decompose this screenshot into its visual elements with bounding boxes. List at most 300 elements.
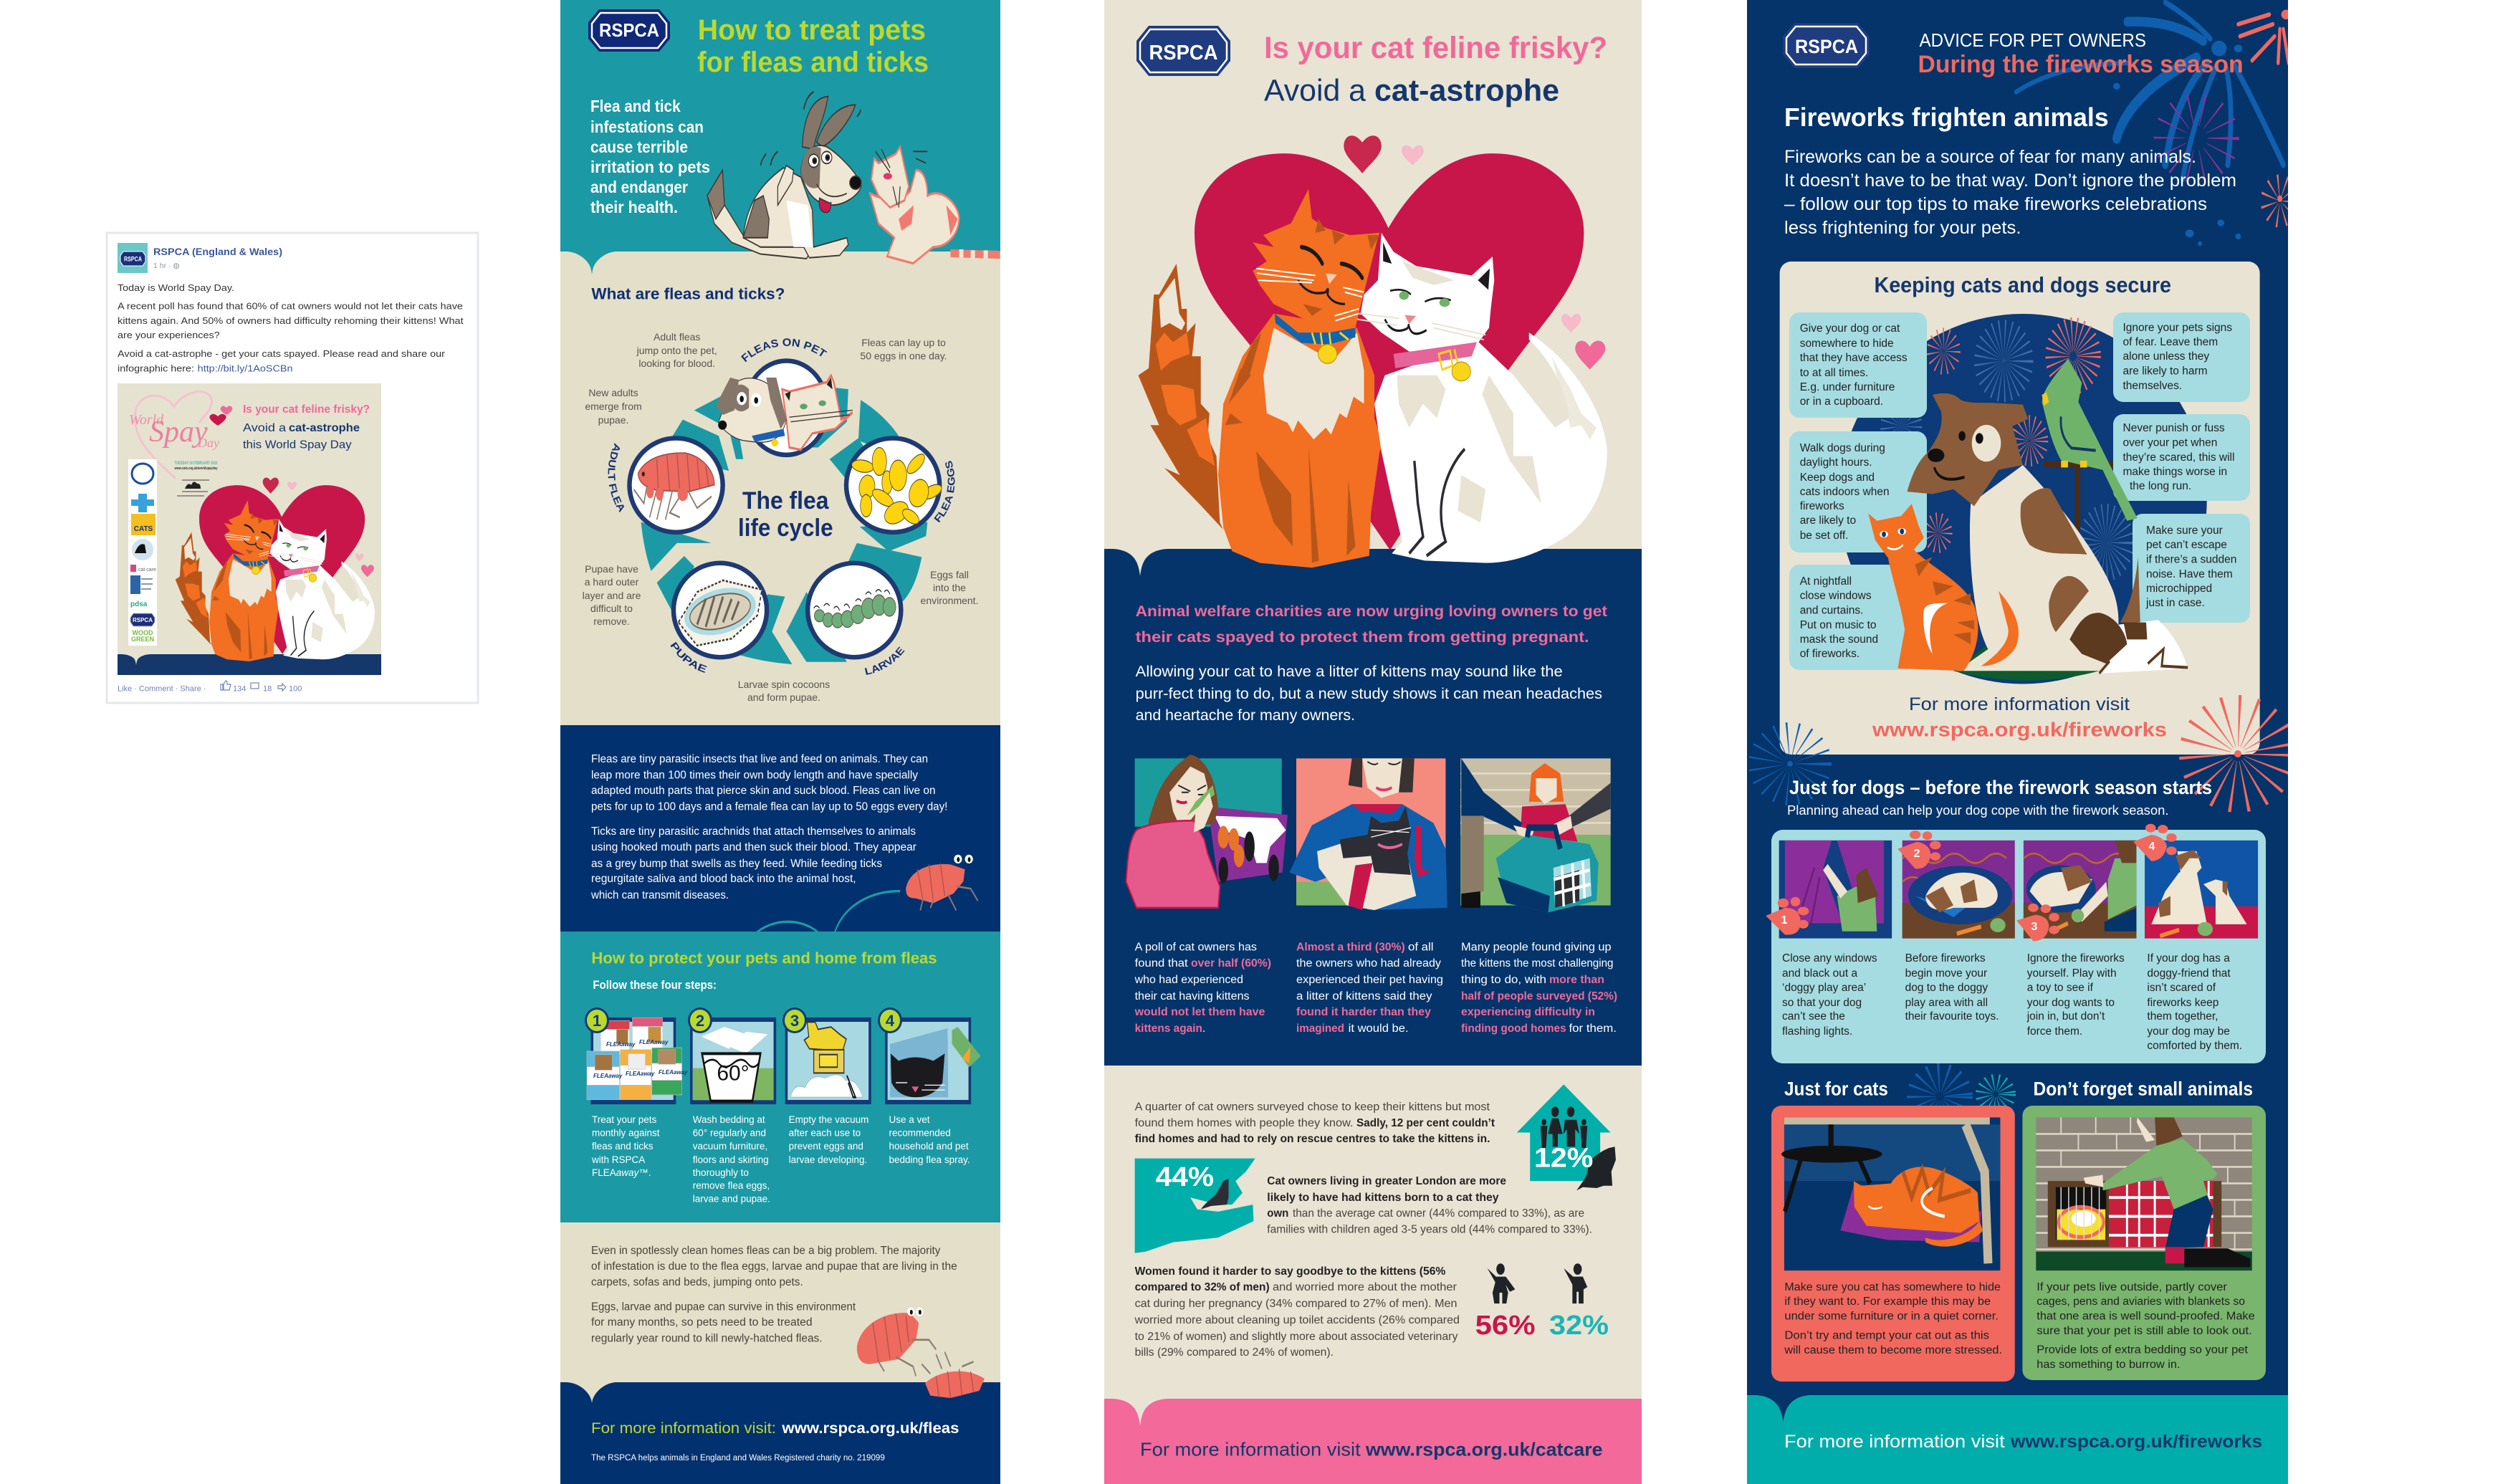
callout: ignore signs of fear: themselves.: [2122, 380, 2182, 392]
footer text: www.rspca.org.uk/fireworks: [2010, 1432, 2262, 1452]
orange cat collar: [1275, 314, 1355, 345]
survey caption 1: who had experienced: [1134, 974, 1243, 986]
callout: never punish: over your pet when: [2122, 437, 2217, 449]
world spay day logo: World: [129, 412, 164, 428]
step captions: can’t see the: [1782, 1010, 1845, 1023]
pack labels: [593, 1039, 688, 1079]
text: will cause them to become more stressed.: [1784, 1344, 2002, 1356]
step 2: wash at 60 degrees: [688, 1007, 775, 1102]
illustration: dog, parrot, cat and guinea pig: [1868, 358, 2188, 674]
callout: close windows: [1789, 565, 1915, 670]
teal steps section: [560, 932, 1000, 1222]
text: women and men: and worried more about the mother: [1273, 1281, 1458, 1293]
step captions: Close any windows: [1782, 952, 1877, 964]
step captions: a toy to see if: [2027, 982, 2094, 994]
callout: ignore signs of fear: of fear. Leave them: [2122, 336, 2218, 348]
step 2: wash at 60 degrees: 60°: [717, 1062, 750, 1086]
stage notes: pupae.: [598, 414, 628, 426]
survey caption 3: for them.: [1569, 1023, 1617, 1035]
step captions: your dog may be: [2147, 1025, 2230, 1038]
step captions: prevent eggs and: [789, 1141, 863, 1152]
intro text: cause terrible: [590, 138, 688, 156]
text: fleas in the home: Eggs, larvae and pupae can survive in this environment: [591, 1301, 856, 1313]
survey caption 1: would not let them have: [1134, 1006, 1265, 1018]
text: women and men: cat during her pregnancy (34% compared to 27% of men). Men: [1135, 1298, 1457, 1310]
text: charities urging: their cats spayed to protect them from getting pregnant.: [1136, 628, 1589, 646]
footer text: [591, 1420, 959, 1463]
orange cat body: [1218, 314, 1383, 568]
survey caption 2: Almost a third (30%): [1296, 942, 1405, 954]
decorative fireworks middle: [1767, 721, 2271, 1115]
text: quarter kept kittens: found them homes with people they know.: [1135, 1117, 1354, 1129]
text: fleas in the home: of infestation is due to the flea eggs, larvae and pupae that are living in the: [591, 1260, 957, 1273]
survey caption 3: thing to do, with: [1461, 974, 1546, 986]
pack labels: FLEAaway: [659, 1069, 688, 1076]
panel: cat spaying infographic: [1104, 0, 1642, 1484]
survey caption 2: it would be.: [1349, 1023, 1409, 1035]
stage notes: looking for blood.: [638, 358, 715, 369]
stage notes: Eggs fall: [930, 569, 969, 580]
text: [1784, 1281, 2002, 1356]
text: has something to burrow in.: [2036, 1359, 2180, 1371]
step captions: yourself. Play with: [2027, 967, 2117, 980]
charity logos: GREEN: [131, 636, 154, 643]
heading: fireworks frighten animals: Fireworks frighten animals: [1784, 102, 2109, 132]
text: charities urging: and heartache for many owners.: [1136, 707, 1355, 724]
survey caption 1: over half (60%): [1191, 957, 1271, 970]
post text: http://bit.ly/1AoSCBn: [198, 364, 293, 374]
text: Make sure you cat has somewhere to hide: [1784, 1281, 2001, 1293]
stage labels on arcs: LARVAE: [864, 646, 904, 675]
charity logos: CATS: [134, 525, 153, 533]
callout: microchip: just in case.: [2145, 597, 2205, 609]
step badge 4: 4: [886, 1012, 895, 1030]
step captions: Before fireworks: [1905, 952, 1986, 964]
survey caption 2: imagined: [1296, 1023, 1344, 1035]
map: south east England 44 percent: 44%: [1156, 1162, 1214, 1192]
callout: somewhere to hide: somewhere to hide: [1800, 338, 1894, 350]
callout: ignore signs of fear: are likely to harm: [2122, 365, 2208, 377]
text: Don’t try and tempt your cat out as this: [1784, 1330, 1989, 1341]
stage circle: larvae: [805, 561, 904, 659]
charity logos: RSPCA: [133, 617, 153, 623]
callout: walk dogs in daylight: Walk dogs during: [1800, 442, 1885, 454]
step captions: dog to the doggy: [1905, 982, 1988, 994]
notch: footer: [560, 1382, 622, 1403]
step captions: force them.: [2027, 1025, 2082, 1038]
white cat: [1374, 332, 1607, 563]
footer text: For more information visit: [1784, 1432, 2005, 1452]
illustration: scratching cat: [870, 147, 1000, 264]
post text: infographic here:: [118, 364, 194, 374]
step captions: Use a vet: [889, 1114, 930, 1125]
illustration: jumping flea: [752, 855, 978, 937]
post actions: 18: [263, 685, 272, 694]
panel: small animals: [2022, 1106, 2266, 1380]
text: Provide lots of extra bedding so your pet: [2036, 1344, 2249, 1356]
stage labels on arcs: ADULT FLEA: [608, 443, 625, 513]
text: what fleas and ticks are: as a grey bump that swells as they feed. While feeding ticks: [591, 858, 882, 870]
panel: just for cats: [1771, 1106, 2015, 1382]
text: what fleas and ticks are: using hooked mouth parts and then suck their blood. They appear: [591, 841, 916, 853]
step captions: bedding flea spray.: [889, 1154, 970, 1165]
step captions: vacuum furniture,: [693, 1141, 767, 1152]
stage circle: adult flea: [627, 436, 725, 535]
callout: walk dogs in daylight: Keep dogs and: [1800, 471, 1875, 484]
text: what fleas and ticks are: Fleas are tiny parasitic insects that live and feed on animals. They can: [591, 753, 928, 765]
text: what fleas and ticks are: which can transmit diseases.: [590, 889, 729, 901]
logo: RSPCA: RSPCA: [1795, 36, 1858, 57]
text: charities urging: Animal welfare charities are now urging loving owners to get: [1136, 603, 1607, 620]
step captions: them together,: [2147, 1010, 2218, 1023]
survey caption 1: .: [1202, 1023, 1205, 1035]
panel: dog steps: [1766, 824, 2266, 1063]
step captions: larvae developing.: [789, 1154, 867, 1165]
step captions: doggy-friend that: [2147, 967, 2231, 980]
callout: never punish: [2113, 414, 2250, 501]
stage labels on arcs: PUPAE: [671, 642, 707, 673]
text: greater London: than the average cat owner (44% compared to 33%), as are: [1293, 1207, 1584, 1220]
text: quarter kept kittens: A quarter of cat owners surveyed chose to keep their kittens but most: [1135, 1101, 1490, 1114]
illustration: cats in love: [1138, 135, 1607, 568]
step captions: play area with all: [1905, 997, 1988, 1009]
paw badge 3: [2016, 904, 2059, 942]
heading: what are fleas and ticks: What are fleas and ticks?: [591, 285, 785, 303]
callout: ignore signs of fear: [2113, 312, 2250, 402]
step captions: isn’t scared of: [2147, 982, 2216, 994]
paw badge 3: 3: [2031, 921, 2038, 933]
text: under some furniture or in a quiet corner.: [1784, 1310, 1999, 1323]
paw badge 2: [1897, 830, 1941, 868]
callout: close windows: close windows: [1800, 590, 1872, 602]
text: If your pets live outside, partly cover: [2036, 1281, 2227, 1293]
callout: walk dogs in daylight: daylight hours.: [1800, 456, 1872, 469]
callout: close windows: At nightfall: [1800, 575, 1852, 588]
notch: navy section: [1104, 547, 1177, 576]
panel: fireworks infographic: [1747, 0, 2291, 1484]
shared image title: cat-astrophe: [289, 422, 360, 434]
panel: facebook post: [107, 233, 478, 703]
world spay day logo: TUESDAY 24 FEBRUARY 2015: [175, 461, 218, 466]
title: [1264, 31, 1607, 108]
title: How to treat pets: [698, 14, 926, 46]
step captions: Empty the vacuum: [789, 1114, 868, 1125]
subheading: four steps: Follow these four steps:: [593, 978, 717, 992]
footer text: [1140, 1439, 1602, 1460]
stage labels on arcs: FLEA EGGS: [934, 461, 954, 523]
pink footer section: [1104, 1399, 1642, 1484]
text: introduction: – follow our top tips to make fireworks celebrations: [1784, 194, 2207, 214]
card link: For more information visit: [1909, 694, 2130, 714]
post text: are your experiences?: [118, 330, 220, 340]
notch: header: [560, 252, 622, 274]
heading: just for dogs: Planning ahead can help your dog cope with the firework season.: [1787, 803, 2168, 818]
step captions: FLEAaway™.: [592, 1167, 651, 1178]
illustration: covering a hutch: [2036, 1117, 2252, 1270]
survey caption 3: Many people found giving up: [1461, 942, 1612, 954]
survey caption 2: experienced their pet having: [1296, 974, 1443, 986]
logo: RSPCA: [588, 9, 670, 52]
text: greater London: Cat owners living in greater London are more: [1267, 1175, 1506, 1187]
step 2 image: dog in bed: [1902, 841, 2015, 939]
callout: ignore signs of fear: Ignore your pets signs: [2122, 322, 2232, 334]
avatar: [118, 243, 148, 273]
illustration: two fleas: [857, 1307, 985, 1398]
text: greater London: [1267, 1175, 1592, 1235]
survey caption 3: finding good homes: [1461, 1023, 1566, 1035]
text: fleas in the home: [591, 1245, 957, 1344]
callout: microchip: pet can’t escape: [2146, 539, 2227, 551]
step captions: household and pet: [889, 1141, 969, 1152]
text: introduction: Fireworks can be a source of fear for many animals.: [1784, 147, 2196, 167]
callout: somewhere to hide: or in a cupboard.: [1800, 396, 1883, 408]
logo: RSPCA: [1136, 26, 1230, 76]
text: introduction: [1784, 147, 2236, 238]
text: sure that your pet is still able to look out.: [2036, 1325, 2252, 1337]
paw badge 4: [2133, 824, 2177, 861]
survey caption 1: A poll of cat owners has: [1135, 942, 1257, 954]
text: greater London: likely to have had kittens born to a cat they: [1267, 1192, 1499, 1204]
step captions: Treat your pets: [592, 1114, 657, 1125]
intro text: and endanger: [590, 178, 688, 196]
shared image title: Is your cat feline frisky?: [243, 403, 370, 416]
survey caption 3: more than: [1549, 974, 1604, 986]
panel: fleas and ticks infographic: [560, 0, 1000, 1484]
footer text: www.rspca.org.uk/catcare: [1365, 1439, 1602, 1460]
text: charities urging: [1136, 603, 1607, 724]
small hearts: [1344, 135, 1605, 370]
guinea pig: [2069, 613, 2188, 674]
survey caption 2: of all: [1408, 942, 1433, 954]
step captions: and black out a: [1782, 967, 1858, 980]
step captions: so that your dog: [1782, 997, 1862, 1009]
timestamp: 1 hr · ◍: [153, 262, 180, 270]
step captions: fleas and ticks: [592, 1141, 654, 1152]
survey caption 2: [1296, 942, 1443, 1035]
step captions: fireworks keep: [2147, 997, 2219, 1009]
callout: microchip: microchipped: [2146, 583, 2212, 595]
header band: [560, 0, 1000, 252]
card link: www.rspca.org.uk/fireworks: [1872, 718, 2167, 741]
post actions: 100: [289, 685, 302, 694]
survey caption 1: [1134, 942, 1271, 1035]
survey caption 3: half of people surveyed (52%): [1461, 990, 1617, 1002]
survey caption 2: found it harder than they: [1296, 1006, 1431, 1018]
step captions: flashing lights.: [1782, 1025, 1852, 1038]
beige life cycle section: [560, 252, 1000, 726]
survey caption 3: experiencing difficulty in: [1461, 1006, 1595, 1018]
logo: RSPCA: [1783, 23, 1870, 68]
callout: somewhere to hide: E.g. under furniture: [1800, 381, 1895, 393]
step badge 1: 1: [593, 1012, 601, 1030]
callout: microchip: Make sure your: [2146, 525, 2223, 537]
shared image title: this World Spay Day: [243, 439, 352, 451]
stage labels on arcs: [608, 338, 954, 675]
text: quarter kept kittens: Sadly, 12 per cent couldn’t: [1356, 1117, 1495, 1129]
dog: [1908, 393, 2140, 671]
illustration: scratching dog: [707, 92, 861, 259]
pack labels: FLEAaway: [626, 1071, 655, 1077]
stat: women 56 percent: [1475, 1263, 1535, 1341]
diagram title: The flea: [742, 487, 830, 514]
callout: somewhere to hide: to at all times.: [1800, 367, 1868, 379]
stage notes: environment.: [921, 595, 978, 606]
heading: small animals: Don’t forget small animals: [2034, 1078, 2253, 1099]
text: fleas in the home: regularly year round to kill newly-hatched fleas.: [591, 1333, 823, 1344]
illustration: night sky and fireworks: [1839, 314, 2207, 684]
step badge 1: [585, 1007, 609, 1033]
card link: [1872, 694, 2167, 741]
heading: how to protect: How to protect your pets and home from fleas: [591, 949, 937, 967]
text: fleas in the home: carpets, sofas and beds, jumping onto pets.: [591, 1276, 803, 1288]
callout: never punish: Never punish or fuss: [2122, 422, 2225, 434]
post text: [118, 283, 464, 374]
text: women and men: Women found it harder to say goodbye to the kittens (56%: [1135, 1265, 1445, 1278]
text: women and men: compared to 32% of men): [1135, 1281, 1270, 1293]
intro text: Flea and tick: [590, 97, 681, 115]
text: cages, pens and aviaries with blankets so: [2036, 1296, 2245, 1308]
stage notes: Larvae spin cocoons: [738, 679, 830, 690]
text: if they want to. For example this may be: [1784, 1296, 1991, 1308]
big heart: [1195, 153, 1584, 550]
perch: [2044, 461, 2117, 530]
card: keeping cats and dogs secure: [1780, 262, 2260, 755]
illustration: rehoming cat carrier: [1460, 758, 1611, 912]
callout: walk dogs in daylight: cats indoors when: [1800, 486, 1890, 498]
intro text: infestations can: [590, 118, 704, 136]
beige environment section: [560, 1222, 1000, 1383]
decorative fireworks top right: [2016, 2, 2291, 246]
post text: kittens again. And 50% of owners had difficulty rehoming their kittens! What: [118, 316, 464, 326]
footer band: [1747, 1395, 2288, 1484]
paw badge 2: 2: [1914, 848, 1920, 860]
card heading: Keeping cats and dogs secure: [1875, 272, 2171, 297]
step badge 4: [878, 1007, 902, 1033]
icon: house 12 percent: [1517, 1084, 1616, 1190]
step 4 image: two dogs: [2145, 841, 2258, 939]
survey caption 2: a litter of kittens said they: [1296, 990, 1432, 1002]
callout: somewhere to hide: that they have access: [1800, 352, 1908, 364]
intro text: irritation to pets: [590, 158, 710, 176]
title: During the fireworks season: [1918, 51, 2244, 78]
callout: close windows: Put on music to: [1800, 619, 1877, 631]
heading: just for cats: Just for cats: [1784, 1078, 1888, 1099]
text: that one area is well sound-proofed. Make: [2036, 1310, 2255, 1323]
footer text: www.rspca.org.uk/fleas: [781, 1420, 959, 1437]
survey caption 3: the kittens the most challenging: [1461, 957, 1614, 970]
pack labels: FLEAaway: [606, 1041, 636, 1048]
illustration: cats on heart (small): [176, 478, 375, 661]
shared image title: Avoid a: [243, 422, 286, 434]
avatar: RSPCA: [124, 255, 142, 262]
beige statistics section: [1104, 1066, 1642, 1399]
step 4: flea spray: [878, 1007, 981, 1102]
callout: walk dogs in daylight: be set off.: [1800, 530, 1848, 542]
parrot: [2042, 358, 2138, 521]
orange cat tail: [1138, 264, 1223, 530]
charity logos: [128, 459, 157, 646]
stage notes: difficult to: [590, 603, 633, 614]
logo: RSPCA: RSPCA: [1149, 42, 1218, 64]
step captions: begin move your: [1905, 967, 1987, 980]
diagram title: [738, 487, 833, 542]
world spay day logo: Spay: [149, 416, 208, 449]
navy footer section: [560, 1382, 1000, 1484]
step captions: [1782, 952, 2242, 1052]
text: what fleas and ticks are: Ticks are tiny parasitic arachnids that attach themselves to animals: [591, 825, 916, 838]
survey caption 1: their cat having kittens: [1135, 990, 1250, 1002]
step captions: ‘doggy play area’: [1782, 982, 1866, 994]
diagram title: life cycle: [738, 514, 833, 542]
text: women and men: [1134, 1265, 1460, 1359]
stage circle: flea eggs: [844, 436, 942, 535]
text: what fleas and ticks are: [590, 753, 947, 901]
text: women and men: to 21% of women) and slightly more about associated veterinary: [1135, 1331, 1458, 1343]
text: [2036, 1281, 2255, 1371]
intro text: [590, 97, 710, 216]
survey caption 1: found that: [1135, 957, 1188, 970]
illustration: woman holding cat: [1289, 758, 1447, 910]
step captions: your dog wants to: [2027, 997, 2115, 1009]
text: introduction: less frightening for your pets.: [1784, 218, 2021, 238]
text: women and men: bills (29% compared to 24% of women).: [1135, 1346, 1334, 1359]
text: fleas in the home: Even in spotlessly clean homes fleas can be a big problem. The majority: [591, 1245, 941, 1257]
text: what fleas and ticks are: pets for up to 100 days and a female flea can lay up to 50 eggs every day!: [591, 801, 947, 813]
footer text: The RSPCA helps animals in England and Wales Registered charity no. 219099: [591, 1454, 885, 1463]
title: ADVICE FOR PET OWNERS: [1919, 29, 2146, 51]
step captions: after each use to: [789, 1128, 861, 1138]
pack labels: FLEAaway: [593, 1073, 623, 1079]
beige top section: [1104, 0, 1642, 549]
callout: somewhere to hide: [1789, 312, 1927, 418]
page name: RSPCA (England & Wales): [153, 246, 282, 257]
title: [697, 14, 929, 78]
navy facts section: [560, 725, 1000, 932]
step 1: flea treatment packs: [585, 1007, 688, 1102]
survey caption 2: the owners who had already: [1296, 957, 1441, 970]
step captions: larvae and pupae.: [693, 1194, 770, 1204]
world spay day logo: [129, 392, 219, 496]
step captions: Wash bedding at: [693, 1114, 765, 1125]
text: women and men: worried more about cleaning up toilet accidents (26% compared: [1134, 1314, 1460, 1326]
charity logos: pdsa: [130, 600, 148, 608]
survey caption 1: kittens again: [1135, 1023, 1202, 1035]
callout: microchip: [2133, 514, 2250, 623]
step captions: floors and skirting: [693, 1154, 769, 1165]
post text: Today is World Spay Day.: [118, 283, 234, 293]
step captions: [591, 1114, 970, 1204]
step 3: empty vacuum: [782, 1007, 870, 1102]
paw badge 1: 1: [1781, 914, 1788, 927]
text: fleas in the home: for many months, so pets need to be treated: [591, 1316, 813, 1329]
title: Avoid a: [1264, 74, 1366, 108]
paw badge 1: [1766, 897, 1809, 934]
title: cat-astrophe: [1374, 74, 1559, 108]
orange cat head: [1253, 189, 1379, 332]
post actions: Like · Comment · Share ·: [118, 685, 206, 694]
callout: close windows: mask the sound: [1800, 633, 1878, 646]
step captions: recommended: [889, 1128, 951, 1138]
step captions: join in, but don’t: [2026, 1010, 2105, 1023]
shared image title: [243, 403, 370, 451]
callout: walk dogs in daylight: [1789, 431, 1927, 552]
navy section: [1104, 549, 1642, 1066]
logo: RSPCA: RSPCA: [599, 19, 659, 41]
text: charities urging: purr-fect thing to do, but a new study shows it can mean headaches: [1136, 686, 1602, 702]
callout: close windows: and curtains.: [1800, 605, 1863, 616]
notch: footer: [1747, 1395, 1819, 1422]
text: greater London: own: [1267, 1207, 1288, 1220]
